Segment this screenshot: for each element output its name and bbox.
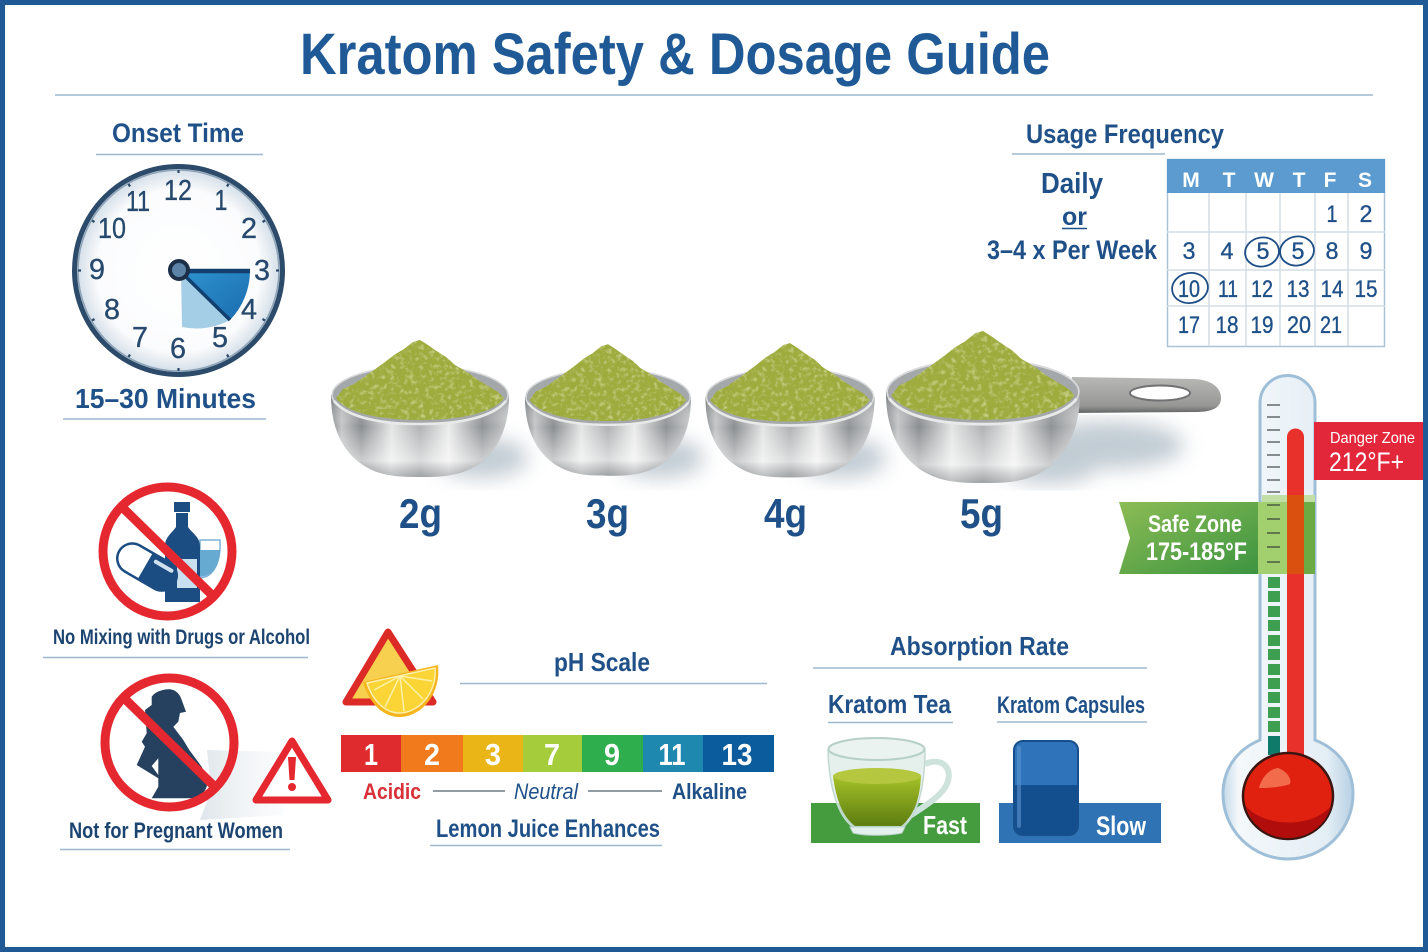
calendar: 9 (1360, 238, 1372, 265)
bowl 3g (525, 344, 691, 476)
caption: pregnancy: Not for Pregnant Women (69, 818, 283, 843)
frequency text: 3–4 x Per Week (987, 235, 1158, 265)
calendar: 4 (1220, 238, 1234, 265)
pH colour bar: 11 (658, 737, 686, 772)
icon: clock: 6 (170, 333, 186, 365)
panel: onset time (63, 118, 282, 419)
danger zone flag (1314, 422, 1423, 480)
thermometer glass (1223, 375, 1353, 859)
calendar: 18 (1216, 312, 1238, 339)
title: Kratom Safety & Dosage Guide (300, 22, 1050, 87)
icon: clock: 1 (214, 185, 228, 217)
calendar: 17 (1178, 312, 1200, 339)
icon: clock: 10 (98, 213, 126, 245)
thermometer scale ticks (1267, 405, 1280, 492)
icon: clock: 11 (126, 186, 150, 218)
frequency text: Daily (1041, 168, 1103, 200)
icon: clock: 5 (212, 322, 228, 354)
dose labels: 2g (399, 490, 442, 537)
dose labels: 3g (586, 490, 629, 537)
scoop handle (1072, 377, 1221, 413)
heading: pH scale: pH Scale (554, 647, 650, 677)
caption: no mixing: No Mixing with Drugs or Alcohol (53, 626, 310, 649)
heading: usage frequency: Usage Frequency (1026, 119, 1224, 149)
danger zone flag: 212°F+ (1329, 447, 1404, 477)
dose labels (399, 490, 1003, 537)
thermometer bulb (1243, 753, 1333, 839)
green gauge segments (1268, 577, 1280, 755)
icon: clock: 8 (104, 294, 120, 326)
fast bar (811, 803, 980, 843)
calendar: S (1358, 169, 1372, 192)
bowl 4g (705, 343, 875, 477)
calendar: 8 (1326, 238, 1338, 265)
pH colour bar: 7 (544, 737, 560, 772)
panel: thermometer (1119, 375, 1423, 859)
red mercury column (1287, 428, 1304, 760)
pH axis labels: Neutral (514, 779, 579, 804)
panel: no mixing warning (43, 487, 310, 658)
dose labels: 5g (960, 490, 1003, 537)
panel: usage frequency (987, 119, 1385, 346)
icon: clock: 12 (164, 175, 192, 207)
icon: paper backdrop (200, 750, 284, 820)
heading: absorption rate: Absorption Rate (890, 631, 1069, 661)
pH axis labels (363, 779, 747, 804)
bowl shadows (436, 421, 1184, 484)
bowl 2g (331, 340, 509, 477)
icon: clock: 2 (241, 213, 257, 245)
pH colour bar (341, 735, 774, 772)
panel: pH scale (341, 632, 774, 846)
slow bar: Slow (1096, 811, 1147, 841)
icon: clock: 9 (89, 254, 105, 286)
frequency text (987, 168, 1158, 265)
icon: pill, bottle and glass prohibited (103, 487, 232, 616)
icon: tea cup (828, 738, 949, 835)
icon: lemon warning (346, 632, 438, 717)
panel: absorption rate (811, 631, 1161, 843)
dose labels: 4g (764, 490, 807, 537)
pH colour bar: 1 (364, 737, 378, 772)
calendar: 3 (1182, 238, 1196, 265)
calendar: 11 (1218, 276, 1238, 303)
heading: onset time: Onset Time (112, 118, 244, 148)
calendar: T (1223, 169, 1236, 192)
icon: clock: 7 (132, 322, 148, 354)
calendar: M (1182, 169, 1200, 192)
subheading: kratom tea: Kratom Tea (828, 689, 951, 719)
calendar: 12 (1251, 276, 1273, 303)
subheading: kratom capsules: Kratom Capsules (997, 692, 1145, 719)
calendar: 21 (1320, 312, 1342, 339)
frequency text: or (1062, 203, 1087, 231)
calendar: 19 (1250, 312, 1274, 339)
panel: dosage scoops (331, 331, 1221, 537)
safe zone ribbon: 175-185°F (1146, 538, 1247, 566)
icon: clock (74, 166, 282, 374)
fast bar: Fast (923, 810, 967, 840)
calendar: 1 (1326, 201, 1338, 228)
calendar: 15 (1354, 276, 1378, 303)
calendar: T (1293, 169, 1306, 192)
bowl 5g (886, 331, 1080, 483)
calendar: 5 (1256, 238, 1270, 265)
icon: warning triangle (256, 741, 328, 800)
calendar: 5 (1292, 238, 1304, 265)
calendar (1167, 159, 1385, 346)
icon: clock: 4 (241, 294, 257, 326)
panel: pregnancy warning (60, 678, 328, 850)
danger zone flag: Danger Zone (1330, 430, 1415, 447)
calendar: 2 (1360, 201, 1372, 228)
pH colour bar: 13 (722, 737, 752, 772)
safe zone ribbon (1119, 495, 1315, 574)
pH colour bar: 9 (604, 737, 620, 772)
icon: capsule block (1014, 741, 1078, 835)
calendar: 10 (1178, 276, 1200, 303)
calendar: F (1324, 169, 1337, 192)
pH colour bar: 3 (485, 737, 501, 772)
pH axis labels: Acidic (363, 779, 421, 804)
pH axis labels: Alkaline (672, 779, 747, 804)
slow bar (999, 803, 1161, 843)
calendar: W (1254, 169, 1274, 192)
lemon juice note: Lemon Juice Enhances (436, 815, 660, 843)
calendar: 20 (1287, 312, 1311, 339)
calendar: 14 (1320, 276, 1344, 303)
onset value: 15–30 Minutes (75, 383, 256, 414)
safe zone ribbon: Safe Zone (1148, 511, 1242, 538)
calendar: 13 (1286, 276, 1310, 303)
icon: clock: 3 (254, 255, 270, 287)
icon: pregnant woman prohibited (105, 678, 234, 807)
pH colour bar: 2 (424, 737, 440, 772)
